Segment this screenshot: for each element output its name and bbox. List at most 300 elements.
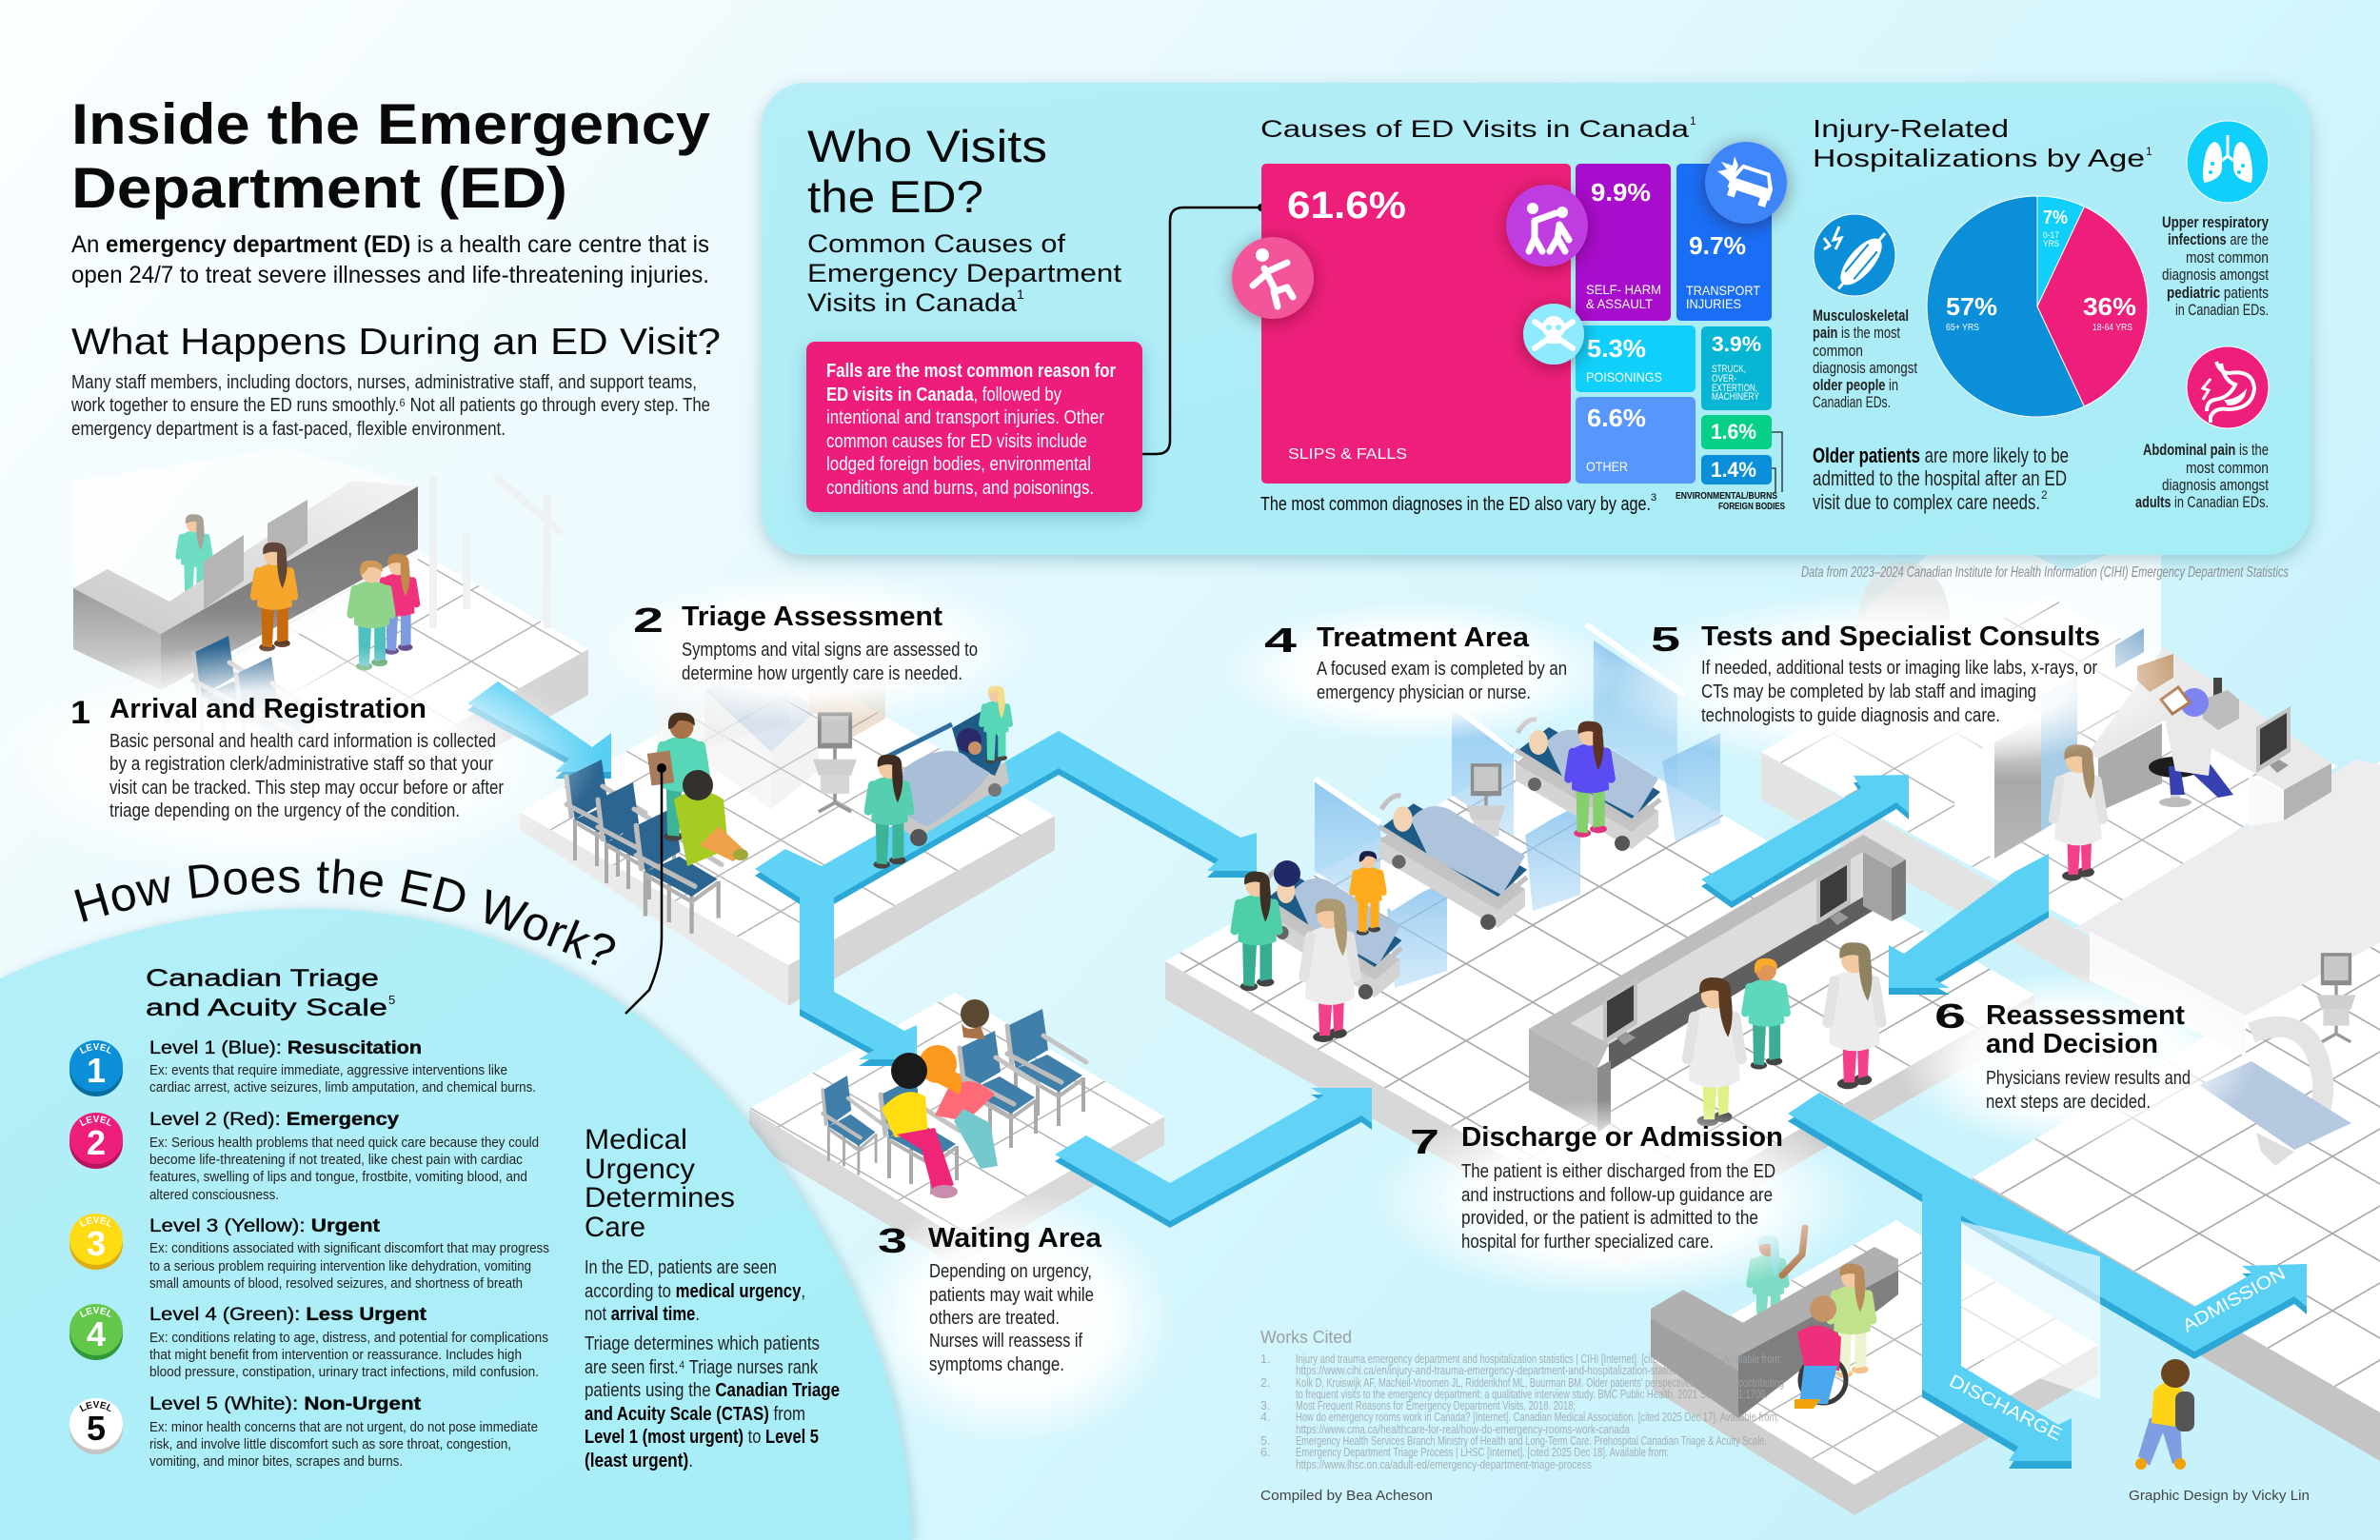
scene: triage room bbox=[566, 657, 1010, 934]
text: older patients: admitted to the hospital after an ED bbox=[1813, 466, 2067, 490]
works cited list: 1. bbox=[1260, 1352, 1270, 1366]
step 1: arrival and registration: triage depending on the urgency of the condition. bbox=[109, 800, 460, 821]
treated patient stretcher bbox=[1264, 868, 1401, 999]
text: upper respiratory: most common bbox=[2186, 248, 2269, 267]
level 3 item bbox=[69, 1214, 549, 1292]
text: staff overview: work together to ensure the ED runs smoothly.⁶ Not all patients go through every step. The bbox=[70, 395, 710, 416]
heading: who visits: the ED? bbox=[807, 171, 983, 222]
step 3: waiting area: others are treated. bbox=[929, 1308, 1060, 1329]
title bbox=[71, 92, 711, 220]
chart title: hospitalizations: 1 bbox=[2146, 145, 2152, 158]
curved heading: how does the ED work: How Does the ED Work? bbox=[74, 859, 615, 965]
heading: triage scale bbox=[146, 965, 395, 1021]
ghost CT room behind panel bbox=[1858, 522, 2161, 723]
wheelchair patient bbox=[1795, 1295, 1846, 1409]
scene: lab and imaging bbox=[1954, 628, 2331, 880]
intro text bbox=[71, 231, 709, 288]
triage chairs bbox=[566, 760, 722, 934]
icon: muscle bbox=[1814, 214, 1895, 297]
tile: transport injuries: TRANSPORT bbox=[1686, 283, 1760, 298]
heading: who visits: Who Visits bbox=[807, 121, 1047, 171]
text: musculoskeletal pain bbox=[1813, 306, 1917, 411]
level 2 item bbox=[69, 1110, 539, 1203]
text: older patients: Older patients are more likely to be bbox=[1813, 444, 2069, 467]
step 2: triage assessment: 2 bbox=[633, 601, 664, 640]
tile: poisonings: POISONINGS bbox=[1586, 369, 1662, 385]
text: older patients: 2 bbox=[2041, 488, 2048, 502]
text: older patients bbox=[1813, 444, 2069, 514]
arrow label: admission: ADMISSION bbox=[2179, 1264, 2289, 1336]
text: medical urgency: and Acuity Scale (CTAS) from bbox=[585, 1404, 805, 1425]
tile: self-harm and assault: SELF- HARM bbox=[1586, 282, 1661, 297]
text: musculoskeletal pain: older people in bbox=[1813, 376, 1898, 394]
discharge receptionist bbox=[1750, 1235, 1786, 1334]
tile: struck, over-exertion, machinery: STRUCK, bbox=[1712, 364, 1746, 375]
step 6: reassessment and decision: and Decision bbox=[1986, 1029, 2158, 1059]
scene: discharge desk bbox=[1651, 1228, 1898, 1418]
step 3: waiting area: Depending on urgency, bbox=[929, 1261, 1092, 1282]
works cited list: to frequent visits to the emergency department: a qualitative interview study. BMC Public Health. 2021 Sept 20;21:1709. bbox=[1296, 1388, 1768, 1401]
lab monitor bbox=[2256, 706, 2291, 773]
tile: struck, over-exertion, machinery: EXTERTION, bbox=[1712, 383, 1757, 394]
subheading: common causes: Common Causes of bbox=[807, 229, 1066, 258]
tile: other: OTHER bbox=[1586, 459, 1628, 474]
level 2 item: become life-threatening if not treated, like chest pain with cardiac bbox=[149, 1152, 523, 1168]
tile: slips and falls: SLIPS & FALLS bbox=[1288, 446, 1407, 463]
person seated behind bbox=[961, 999, 989, 1039]
patient pair bbox=[351, 554, 416, 670]
caption: diagnoses vary: The most common diagnoses in the ED also vary by age. bbox=[1260, 494, 1651, 515]
text: medical urgency: Triage determines which patients bbox=[585, 1333, 820, 1354]
step 1: arrival and registration bbox=[70, 694, 504, 821]
station doctor bbox=[1688, 977, 1741, 1126]
panel: how does the ED work bbox=[0, 909, 912, 1540]
nurse in purple at stretcher bbox=[1569, 721, 1611, 838]
text: musculoskeletal pain: diagnosis amongst bbox=[1813, 359, 1917, 377]
scene: registration desk bbox=[73, 481, 418, 774]
text: upper respiratory: Upper respiratory bbox=[2162, 213, 2269, 231]
chart title: hospitalizations: Hospitalizations by Age bbox=[1813, 144, 2145, 172]
small tile brackets and labels: ENVIRONMENTAL/BURNS bbox=[1676, 491, 1777, 502]
tile: struck, over-exertion, machinery bbox=[1701, 326, 1772, 410]
arrow: waiting to treatment bbox=[1055, 1088, 1372, 1228]
leader line from triage to how does the ED work bbox=[625, 763, 666, 1014]
level 4 item: Ex: conditions relating to age, distress, and potential for complications bbox=[149, 1330, 548, 1346]
credit: design by: Graphic Design by Vicky Lin bbox=[2129, 1488, 2310, 1504]
heading: triage scale: 5 bbox=[388, 993, 395, 1007]
arrow: tests to reassessment bbox=[1889, 854, 2049, 995]
step 2: triage assessment: Triage Assessment bbox=[682, 602, 942, 632]
intro text: An emergency department (ED) is a health care centre that is bbox=[71, 231, 709, 258]
floor: reassessment room bbox=[1961, 760, 2380, 1461]
small tile brackets and labels: FOREIGN BODIES bbox=[1718, 502, 1785, 512]
supply boxes bbox=[2137, 654, 2173, 692]
glass partition over discharge fork bbox=[1961, 1221, 2100, 1399]
c-arm scanner bbox=[2251, 1027, 2323, 1128]
tile: foreign bodies: 1.4% bbox=[1711, 458, 1756, 482]
white text glows bbox=[0, 571, 2256, 1447]
text: medical urgency bbox=[585, 1257, 840, 1471]
tile: poisonings bbox=[1576, 326, 1696, 392]
level 1 item: Level 1 (Blue): Resuscitation bbox=[149, 1038, 422, 1058]
step 4: treatment area: Treatment Area bbox=[1317, 622, 1530, 653]
works cited list: 3. bbox=[1260, 1399, 1270, 1412]
arrow: triage branching to treatment and waiting bbox=[755, 731, 1257, 1066]
text: musculoskeletal pain: Musculoskeletal bbox=[1813, 306, 1909, 325]
treemap: causes of ED visits bbox=[1261, 164, 1772, 484]
text: abdominal pain: Abdominal pain is the bbox=[2143, 441, 2269, 459]
text: abdominal pain: adults in Canadian EDs. bbox=[2135, 493, 2269, 511]
subheading: common causes: Emergency Department bbox=[807, 259, 1122, 287]
step 4: treatment area bbox=[1264, 621, 1567, 703]
registration counter bbox=[73, 481, 418, 690]
callout: falls: intentional and transport injuries. Other bbox=[826, 407, 1104, 428]
slice: 57 percent seniors: 57% bbox=[1946, 292, 1997, 321]
scene: imaging equipment bbox=[2199, 953, 2355, 1166]
upper stretcher bbox=[1516, 720, 1660, 851]
icon: stomach bbox=[2187, 346, 2269, 428]
level 5 item: 5 bbox=[87, 1409, 106, 1448]
desk monitors bbox=[204, 500, 307, 609]
level 1 item: 1 bbox=[87, 1051, 106, 1090]
tile: self-harm and assault: 9.9% bbox=[1591, 178, 1651, 207]
floor: arrival platform bbox=[73, 447, 588, 815]
text: upper respiratory: in Canadian EDs. bbox=[2175, 301, 2269, 319]
step 5: tests and specialist consults: 5 bbox=[1651, 620, 1680, 659]
text: abdominal pain: most common bbox=[2186, 459, 2269, 477]
step 5: tests and specialist consults bbox=[1651, 620, 2100, 726]
level 2 item: Ex: Serious health problems that need quick care because they could bbox=[149, 1135, 539, 1151]
patient at the desk bbox=[254, 543, 294, 651]
text: upper respiratory: diagnosis amongst bbox=[2162, 266, 2269, 284]
step 3: waiting area: Waiting Area bbox=[928, 1223, 1102, 1254]
level 3 item: small amounts of blood, resolved seizures, and shortness of breath bbox=[149, 1275, 523, 1292]
step 5: tests and specialist consults: If needed, additional tests or imaging like labs, x-rays, or bbox=[1701, 658, 2097, 679]
step 1: arrival and registration: Basic personal and health card information is collected bbox=[109, 731, 496, 752]
step 3: waiting area bbox=[878, 1221, 1102, 1375]
level 4 item: LEVEL bbox=[80, 1307, 110, 1317]
treatment doctor bbox=[1304, 898, 1356, 1042]
step 6: reassessment and decision: Physicians review results and bbox=[1986, 1068, 2191, 1089]
arrival waiting chairs bbox=[193, 636, 315, 774]
step 3: waiting area: 3 bbox=[878, 1221, 907, 1260]
step 1: arrival and registration: visit can be tracked. This step may occur before or after bbox=[109, 778, 504, 799]
tile: struck, over-exertion, machinery: OVER- bbox=[1712, 373, 1736, 385]
chart title: hospitalizations: Injury-Related bbox=[1813, 114, 2009, 143]
connector from callout to treemap bbox=[1142, 204, 1265, 454]
step 6: reassessment and decision: next steps are decided. bbox=[1986, 1092, 2151, 1113]
text: musculoskeletal pain: Canadian EDs. bbox=[1813, 393, 1891, 411]
helper in orange bbox=[1353, 851, 1383, 936]
tile: slips and falls bbox=[1261, 164, 1571, 484]
slice: 36 percent adults: 36% bbox=[2083, 292, 2136, 321]
callout: falls: lodged foreign bodies, environmental bbox=[826, 454, 1091, 475]
arrow: discharge and admission fork bbox=[1788, 1093, 2307, 1469]
text: medical urgency: not arrival time. bbox=[585, 1304, 700, 1325]
level 5 item: Ex: minor health concerns that are not urgent, do not pose immediate bbox=[149, 1419, 538, 1435]
level 1 item bbox=[69, 1038, 536, 1096]
treatment nurse bbox=[1235, 872, 1279, 991]
lab technician on stool bbox=[2149, 687, 2233, 807]
text: abdominal pain: diagnosis amongst bbox=[2162, 476, 2269, 494]
works cited list: 2. bbox=[1260, 1376, 1270, 1390]
heading: medical urgency: Urgency bbox=[585, 1154, 695, 1185]
step 6: reassessment and decision: 6 bbox=[1934, 997, 1966, 1036]
step 5: tests and specialist consults: Tests and Specialist Consults bbox=[1701, 622, 2100, 652]
station nurse bbox=[1745, 958, 1787, 1070]
scene: central staff station bbox=[1529, 835, 1906, 1133]
tile: other: 6.6% bbox=[1587, 404, 1646, 432]
scene: waiting room bbox=[823, 999, 1086, 1198]
staff: registration clerk bbox=[179, 514, 209, 600]
text: musculoskeletal pain: common bbox=[1813, 342, 1863, 360]
level 4 item: blood pressure, constipation, urinary tract infections, mild confusion. bbox=[149, 1364, 539, 1380]
text: upper respiratory: pediatric patients bbox=[2167, 284, 2269, 302]
text: upper respiratory bbox=[2162, 213, 2269, 319]
icon: assault bbox=[1506, 185, 1588, 267]
walking patient with backpack bbox=[2135, 1359, 2194, 1470]
step 1: arrival and registration: Arrival and Registration bbox=[109, 694, 426, 724]
works cited list: https://www.lhsc.on.ca/adult-ed/emergency-department-triage-process bbox=[1296, 1458, 1592, 1471]
level 2 item: features, swelling of lips and tongue, frostbite, vomiting blood, and bbox=[149, 1169, 527, 1185]
step 5: tests and specialist consults: technologists to guide diagnosis and care. bbox=[1701, 705, 2000, 726]
triage vitals monitor bbox=[813, 712, 857, 812]
level 4 item: that might benefit from intervention or reassurance. Includes high bbox=[149, 1347, 522, 1363]
faded triage bed and boxes bbox=[704, 657, 885, 809]
works cited list: https://www.cihi.ca/en/injury-and-trauma-emergency-department-and-hospitalization-statistics bbox=[1296, 1364, 1687, 1377]
level 3 item: Ex: conditions associated with significant discomfort that may progress bbox=[149, 1240, 549, 1256]
small tile brackets and labels bbox=[1676, 432, 1785, 512]
floor: triage platform bbox=[520, 609, 1055, 1006]
level 1 item: cardiac arrest, active seizures, limb amputation, and chemical burns. bbox=[149, 1079, 536, 1096]
step 2: triage assessment: Symptoms and vital signs are assessed to bbox=[682, 640, 978, 661]
step 6: reassessment and decision bbox=[1934, 997, 2191, 1113]
tile: transport injuries: 9.7% bbox=[1689, 231, 1746, 260]
imaging table bbox=[2199, 1061, 2351, 1166]
nurse pushing gurney bbox=[868, 755, 910, 869]
level 5 item: vomiting, and minor bites, scrapes and burns. bbox=[149, 1453, 403, 1470]
blonde nurse bbox=[982, 685, 1010, 763]
level 3 item: Level 3 (Yellow): Urgent bbox=[149, 1216, 381, 1236]
subheading: common causes: 1 bbox=[1017, 286, 1024, 302]
heading: what happens: What Happens During an ED Visit? bbox=[71, 322, 721, 363]
lab doctor bbox=[2053, 744, 2103, 880]
text: medical urgency: (least urgent). bbox=[585, 1451, 693, 1471]
level 2 item: 2 bbox=[87, 1123, 106, 1162]
tile: transport injuries: INJURIES bbox=[1686, 296, 1741, 311]
step 7: discharge or admission: hospital for further specialized care. bbox=[1461, 1232, 1714, 1253]
slice: 36 percent adults: 18-64 YRS bbox=[2092, 323, 2132, 333]
callout: falls: Falls are the most common reason for bbox=[826, 361, 1116, 382]
level 3 item: 3 bbox=[87, 1224, 106, 1263]
title: Department (ED) bbox=[71, 156, 567, 220]
discharge desk body bbox=[1651, 1247, 1898, 1418]
step 3: waiting area: Nurses will reassess if bbox=[929, 1331, 1082, 1352]
pie chart: age bbox=[1927, 196, 2148, 417]
step 6: reassessment and decision: Reassessment bbox=[1986, 1000, 2185, 1031]
step 7: discharge or admission: The patient is either discharged from the ED bbox=[1461, 1161, 1775, 1182]
level 5 item: LEVEL bbox=[80, 1401, 110, 1412]
text: staff overview bbox=[70, 372, 710, 440]
works cited list: Injury and trauma emergency department and hospitalization statistics | CIHI [Internet]. [cited 2025 Dec 17]. Available from: bbox=[1296, 1352, 1782, 1366]
heading: medical urgency bbox=[585, 1124, 735, 1243]
icon: car crash bbox=[1705, 142, 1787, 224]
level 3 item: to a serious problem requiring intervention like dehydration, vomiting bbox=[149, 1258, 531, 1274]
credit: compiled by: Compiled by Bea Acheson bbox=[1260, 1488, 1433, 1504]
step 5: tests and specialist consults: CTs may be completed by lab staff and imaging bbox=[1701, 681, 2036, 702]
level 1 item: LEVEL bbox=[79, 1043, 110, 1055]
text: medical urgency: according to medical urgency, bbox=[585, 1281, 805, 1302]
tile: struck, over-exertion, machinery: 3.9% bbox=[1712, 332, 1761, 356]
step 7: discharge or admission: Discharge or Admission bbox=[1461, 1122, 1783, 1153]
tile: environmental and burns: 1.6% bbox=[1711, 420, 1756, 444]
level 5 item: Level 5 (White): Non-Urgent bbox=[149, 1394, 422, 1414]
step 1: arrival and registration: by a registration clerk/administrative staff so that your bbox=[109, 754, 493, 775]
lab fridge and counter bbox=[1954, 647, 2331, 859]
slice: 7 percent children: 7% bbox=[2043, 207, 2068, 228]
tile: environmental and burns bbox=[1701, 415, 1772, 449]
level 4 item: Level 4 (Green): Less Urgent bbox=[149, 1305, 427, 1325]
works cited list: Emergency Department Triage Process | LHSC [Internet]. [cited 2025 Dec 18]. Available from: bbox=[1296, 1446, 1669, 1459]
text: musculoskeletal pain: pain is the most bbox=[1813, 324, 1900, 342]
slice: 7 percent children: 0-17 bbox=[2043, 230, 2059, 240]
level 3 item: LEVEL bbox=[79, 1216, 110, 1228]
icon: poison skull bbox=[1523, 304, 1584, 365]
heading: triage scale: Canadian Triage bbox=[146, 965, 379, 992]
chart title: causes bbox=[1260, 114, 1696, 143]
title: Inside the Emergency bbox=[71, 92, 711, 156]
step 3: waiting area: symptoms change. bbox=[929, 1354, 1064, 1375]
floor: tests room bbox=[1761, 595, 2337, 985]
heading: triage scale: and Acuity Scale bbox=[146, 995, 387, 1021]
slice: 57 percent seniors bbox=[1927, 196, 2084, 417]
slice: 57 percent seniors: 65+ YRS bbox=[1946, 323, 1979, 333]
callout: falls: ED visits in Canada, followed by bbox=[826, 385, 1061, 405]
seated person with yellow hoodie bbox=[882, 1053, 958, 1198]
icon: lungs bbox=[2187, 121, 2269, 203]
patient on stretcher bbox=[1274, 860, 1300, 887]
works cited list: https://www.cma.ca/healthcare-for-real/how-do-emergency-rooms-work-canada bbox=[1296, 1423, 1630, 1436]
text: staff overview: emergency department is a fast-paced, flexible environment. bbox=[71, 419, 506, 440]
works cited list: How do emergency rooms work in Canada? [Internet]. Canadian Medical Association. [cited 2025 Dec 17]. Available from: bbox=[1296, 1411, 1779, 1424]
text: medical urgency: are seen first.⁴ Triage nurses rank bbox=[585, 1357, 819, 1378]
text: medical urgency: Level 1 (most urgent) to Level 5 bbox=[585, 1427, 819, 1448]
slice: 36 percent adults bbox=[2037, 207, 2148, 406]
tile: self-harm and assault bbox=[1576, 164, 1671, 321]
caption: diagnoses vary: 3 bbox=[1651, 492, 1656, 503]
tile: foreign bodies bbox=[1701, 455, 1772, 484]
tile: poisonings: 5.3% bbox=[1587, 334, 1646, 363]
callout: falls: conditions and burns, and poisonings. bbox=[826, 478, 1094, 499]
text: medical urgency: patients using the Canadian Triage bbox=[585, 1380, 840, 1401]
intro text: open 24/7 to treat severe illnesses and life-threatening injuries. bbox=[71, 262, 709, 288]
receptionist waving hand bbox=[1782, 1228, 1805, 1275]
tile: transport injuries bbox=[1676, 164, 1772, 321]
curtain set bbox=[1315, 624, 1720, 988]
level 4 item: 4 bbox=[87, 1314, 106, 1353]
step 4: treatment area: emergency physician or nurse. bbox=[1317, 682, 1531, 703]
step 7: discharge or admission: provided, or the patient is admitted to the bbox=[1461, 1208, 1758, 1229]
tile: struck, over-exertion, machinery: MACHINERY bbox=[1712, 391, 1759, 403]
seated friend with red hair bbox=[919, 1045, 998, 1169]
step 1: arrival and registration: 1 bbox=[70, 695, 90, 731]
subheading: common causes bbox=[807, 229, 1122, 317]
icon: falling person bbox=[1232, 237, 1314, 319]
subheading: common causes: Visits in Canada bbox=[807, 288, 1018, 317]
works cited list bbox=[1260, 1352, 1784, 1471]
chart title: causes: Causes of ED Visits in Canada bbox=[1260, 116, 1689, 143]
chart title: causes: 1 bbox=[1690, 114, 1696, 128]
floor: treatment and central area bbox=[1165, 728, 2034, 1266]
works cited list: Kolk D, Kruiswijk AF, MacNeil-Vroomen JL, Ridderikhof ML, Buurman BM. Older patients' perspectives on factors contributing bbox=[1296, 1376, 1784, 1390]
visitor behind wheelchair bbox=[1831, 1264, 1873, 1378]
specimen poster bbox=[2115, 628, 2144, 668]
level 2 item: altered consciousness. bbox=[149, 1187, 279, 1203]
level 1 item: Ex: events that require immediate, aggressive interventions like bbox=[149, 1062, 507, 1078]
works cited heading: Works Cited bbox=[1260, 1328, 1352, 1347]
callout: falls bbox=[806, 342, 1142, 512]
callout: falls: common causes for ED visits include bbox=[826, 431, 1087, 452]
triage nurse with clipboard bbox=[647, 713, 705, 841]
gurney with patient bbox=[885, 709, 1009, 846]
level 2 item: LEVEL bbox=[79, 1116, 110, 1127]
scene: treatment area bbox=[1235, 624, 1720, 1042]
step 4: treatment area: A focused exam is completed by an bbox=[1317, 659, 1567, 680]
works cited list: 6. bbox=[1260, 1446, 1270, 1459]
level 5 item: risk, and involve little discomfort such as sore throat, congestion, bbox=[149, 1436, 511, 1452]
bay monitor bbox=[1467, 763, 1505, 853]
tile: slips and falls: 61.6% bbox=[1287, 185, 1406, 227]
step 7: discharge or admission bbox=[1410, 1122, 1783, 1253]
level 4 item bbox=[69, 1304, 548, 1380]
seated triage patient bbox=[674, 770, 748, 866]
heading: medical urgency: Determines bbox=[585, 1182, 735, 1214]
step 3: waiting area: patients may wait while bbox=[929, 1285, 1094, 1306]
microscope bbox=[2203, 678, 2239, 730]
station monitors bbox=[1603, 859, 1851, 1045]
step 7: discharge or admission: 7 bbox=[1410, 1122, 1439, 1161]
panel: who visits the ED bbox=[762, 83, 2311, 555]
tile: other bbox=[1576, 397, 1696, 484]
works cited list: Emergency Health Services Branch Ministry of Health and Long-Term Care. Prehospital Canadian Triage & Acuity Scale. bbox=[1296, 1434, 1767, 1448]
step 7: discharge or admission: and instructions and follow-up guidance are bbox=[1461, 1185, 1773, 1206]
slice: 7 percent children: YRS bbox=[2043, 239, 2059, 248]
works cited list: 4. bbox=[1260, 1411, 1270, 1424]
slice: 7 percent children bbox=[2037, 196, 2084, 306]
floor: waiting platform bbox=[749, 993, 1164, 1266]
text: abdominal pain bbox=[2135, 441, 2269, 511]
step 2: triage assessment bbox=[633, 601, 978, 684]
step 2: triage assessment: determine how urgently care is needed. bbox=[682, 663, 962, 684]
works cited list: Most Frequent Reasons for Emergency Department Visits, 2018. 2018; bbox=[1296, 1399, 1576, 1412]
heading: who visits bbox=[807, 121, 1047, 222]
heading: medical urgency: Medical bbox=[585, 1124, 687, 1155]
arrow: arrival to triage bbox=[467, 681, 611, 779]
station physician bbox=[1828, 942, 1881, 1089]
waiting chairs bbox=[823, 1009, 1086, 1194]
step 4: treatment area: 4 bbox=[1264, 621, 1297, 660]
level 2 item: Level 2 (Red): Emergency bbox=[149, 1110, 399, 1130]
works cited list: 5. bbox=[1260, 1434, 1270, 1448]
level 5 item bbox=[69, 1394, 538, 1470]
tile: self-harm and assault: & ASSAULT bbox=[1586, 296, 1653, 311]
arrow: treatment to tests bbox=[1701, 775, 1909, 908]
floor: discharge platform bbox=[1653, 1220, 2098, 1515]
heading: medical urgency: Care bbox=[585, 1212, 645, 1243]
text: upper respiratory: infections are the bbox=[2168, 230, 2269, 248]
text: staff overview: Many staff members, including doctors, nurses, administrative staff, and support teams, bbox=[71, 372, 697, 393]
text: medical urgency: In the ED, patients are seen bbox=[585, 1257, 777, 1278]
